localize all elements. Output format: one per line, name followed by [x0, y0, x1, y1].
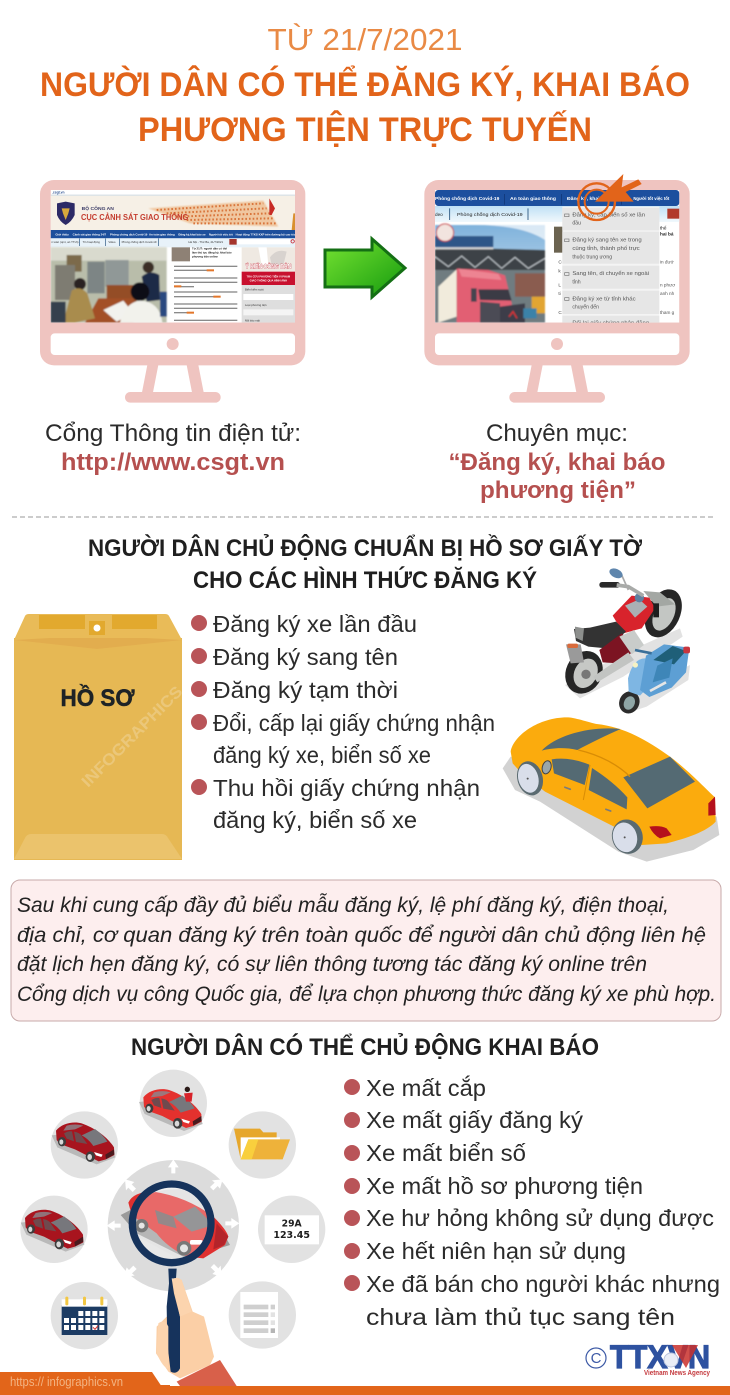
monitor: csgt.vn home page: .csgt.vn [52, 191, 65, 195]
title: NGƯỜI DÂN CÓ THỂ ĐĂNG KÝ, KHAI BÁO [40, 66, 690, 104]
news column: phương tiện online [192, 254, 218, 258]
icon: yellow car [503, 717, 719, 862]
dropdown menu [562, 207, 659, 326]
monitor: registration menu: deo [435, 212, 443, 217]
monitor: registration menu: tham g [660, 310, 675, 315]
sidebar: GIAO THÔNG QUA HÌNH ẢNH [250, 278, 287, 283]
list: registration types: đăng ký, biển số xe [213, 807, 417, 833]
monitor: registration menu: thể [660, 224, 667, 230]
icon: license plate: 29A [282, 1219, 302, 1230]
monitor: csgt.vn home page: Giới thiệu [55, 232, 69, 236]
callout: note: đặt lịch hẹn đăng ký, có sự liên thông tương tác đăng ký online trên [17, 953, 647, 976]
footer bar: https:// infographics.vn [10, 1375, 123, 1389]
icon: dark red car [52, 1122, 115, 1164]
list: registration types: Đăng ký xe lần đầu [213, 611, 417, 637]
diagram: vehicle lookup [20, 1070, 325, 1386]
dropdown menu: cùng tỉnh, thành phố trực [572, 245, 640, 252]
logo: TTXVN: TTXVN [610, 1339, 710, 1375]
sidebar: TRA CỨU PHƯƠNG TIỆN VI PHẠM [247, 273, 291, 278]
callout: note: địa chỉ, cơ quan đăng ký trên toàn quốc để người dân chủ động liên hệ [17, 924, 706, 947]
caption: section: phương tiện” [480, 477, 636, 504]
footer bar [0, 1372, 730, 1395]
caption: portal: http://www.csgt.vn [61, 449, 285, 476]
heading: prepare documents: NGƯỜI DÂN CHỦ ĐỘNG CHUẨN BỊ HỒ SƠ GIẤY TỜ [88, 533, 642, 562]
sidebar [242, 247, 295, 323]
monitor: registration menu: An toàn giao thông [510, 196, 556, 201]
list: registration types: Đăng ký tạm thời [213, 677, 398, 703]
heading: declare: NGƯỜI DÂN CÓ THỂ CHỦ ĐỘNG KHAI BÁO [131, 1032, 599, 1061]
sidebar: Ý KIẾN CÔNG DÂN [245, 262, 291, 270]
callout: note [11, 880, 721, 1021]
icon: folder [234, 1129, 290, 1159]
office photo [51, 247, 167, 323]
monitor: csgt.vn home page: Hà Nội - Thứ Ba, 21/7/2021 [188, 240, 223, 244]
monitor: csgt.vn home page [40, 180, 305, 403]
logo: TTXVN: C [591, 1350, 602, 1367]
icon: dark red car 2 [21, 1210, 84, 1252]
caption: section: Chuyên mục: [486, 420, 628, 447]
callout: note: Cổng dịch vụ công Quốc gia, để lựa chọn phương thức đăng ký xe phù hợp. [17, 983, 716, 1006]
monitor: registration menu: Người tốt việc tốt [633, 195, 670, 201]
title: TỪ 21/7/2021 [268, 22, 462, 57]
icon: magnifier and hand [132, 1183, 237, 1386]
news column: Từ 21/7: người dân có thể [192, 246, 227, 250]
heading: prepare documents [88, 533, 642, 594]
icon: calendar [62, 1297, 107, 1335]
icon: license plate [265, 1215, 319, 1244]
sidebar: Mã bảo mật [245, 319, 260, 323]
monitor: registration menu: anh nh [660, 291, 675, 296]
monitor: registration menu: ti [558, 291, 561, 296]
caption: portal: Cổng Thông tin điện tử: [45, 420, 301, 447]
icon: envelope: HỒ SƠ [60, 684, 135, 712]
list: registration types: Thu hồi giấy chứng nhận [213, 775, 480, 801]
monitor: csgt.vn home page: Phòng chống dịch Covid-19 [110, 232, 148, 236]
caption: section [448, 420, 666, 504]
dropdown menu: Đăng ký xe từ tỉnh khác [572, 296, 636, 303]
monitor: csgt.vn home page: Video [108, 240, 116, 244]
icon: license plate: 123.45 [273, 1230, 310, 1241]
list: declaration cases: Xe mất giấy đăng ký [366, 1107, 584, 1133]
monitor: csgt.vn home page: CỤC CẢNH SÁT GIAO THÔNG [81, 213, 188, 222]
icon: red car under magnifier [121, 1192, 230, 1258]
monitor: csgt.vn home page: Tin hoạt động [83, 240, 100, 244]
dropdown menu: Đổi lại giấy chứng nhận đăng [572, 319, 649, 326]
list: registration types: Đăng ký sang tên [213, 644, 398, 670]
news column: làm thủ tục đăng ký, khai báo [192, 250, 232, 254]
monitor: csgt.vn home page: An toàn giao thông [149, 232, 175, 236]
list: registration types: đăng ký xe, biển số xe [213, 742, 431, 768]
monitor: csgt.vn home page: Hoạt động TTKS KXP trên đường bộ cao tốc [236, 232, 296, 236]
caption: section: “Đăng ký, khai báo [448, 449, 666, 476]
icon: envelope [14, 614, 187, 860]
list: declaration cases: Xe đã bán cho người khác nhưng [366, 1271, 720, 1297]
icon: motorcycle [558, 566, 690, 717]
list: declaration cases: Xe hết niên hạn sử dụng [366, 1238, 626, 1264]
dropdown menu: Sang tên, di chuyển xe ngoài [572, 270, 649, 277]
monitor: registration menu: Phòng chống dịch Covid-19 [457, 212, 523, 217]
heading: prepare documents: CHO CÁC HÌNH THỨC ĐĂNG KÝ [193, 566, 537, 594]
sidebar: Biển kiểm soát [245, 288, 264, 292]
monitor: registration menu: in đướ [660, 259, 674, 264]
list: declaration cases: chưa làm thủ tục sang tên [366, 1304, 675, 1330]
list: registration types: Đổi, cấp lại giấy chứng nhận [213, 710, 495, 736]
list: declaration cases: Xe mất cắp [366, 1075, 486, 1101]
icon: envelope: INFOGRAPHICS [79, 683, 187, 791]
monitor: registration menu: C [558, 310, 562, 315]
monitor: registration menu: hai bả [660, 232, 674, 237]
dropdown menu: chuyển đến [572, 304, 599, 311]
arrow: green [325, 239, 405, 297]
dropdown menu: Đăng ký, cấp biển số xe lần [572, 212, 645, 219]
icon: red car with person [139, 1087, 203, 1131]
monitor: registration menu: n phươ [660, 283, 675, 288]
monitor: csgt.vn home page: Phòng chống dịch Covid-19 [122, 240, 157, 244]
center disc [107, 1159, 239, 1291]
title [40, 22, 690, 149]
monitor: csgt.vn home page: BỘ CÔNG AN [82, 204, 114, 212]
dropdown menu: đầu [572, 221, 581, 227]
monitor: registration menu: C [558, 259, 562, 264]
sidebar: Loại phương tiện [245, 303, 267, 307]
dropdown menu: Đăng ký sang tên xe trong [572, 238, 642, 244]
monitor: registration menu [424, 174, 690, 403]
list: registration types [191, 611, 495, 833]
title: PHƯƠNG TIỆN TRỰC TUYẾN [138, 111, 592, 149]
caption: portal [45, 420, 301, 476]
list: declaration cases [344, 1075, 720, 1330]
monitor: registration menu: Đăng ký, khai báo xe [567, 196, 617, 201]
monitor: csgt.vn home page: n toàn (qmt, an TTxh) [51, 240, 79, 244]
monitor: csgt.vn home page: Cảnh sát giao thông 24/7 [73, 232, 107, 236]
dropdown menu: thuộc trung ương [572, 254, 612, 260]
icon: document list [240, 1292, 278, 1338]
list: declaration cases: Xe hư hỏng không sử dụng được [366, 1205, 714, 1231]
icon: orange pointer [578, 174, 642, 220]
dropdown menu: tỉnh [572, 278, 581, 285]
callout: note: Sau khi cung cấp đầy đủ biểu mẫu đăng ký, lệ phí đăng ký, điện thoại, [17, 894, 669, 917]
truck photo [435, 224, 545, 323]
monitor: csgt.vn home page: Đăng ký,khai báo xe [178, 232, 206, 236]
monitor: registration menu: Phòng chống dịch Covid-19 [435, 195, 500, 201]
monitor: csgt.vn home page: Người tốt việc tốt [209, 232, 233, 236]
logo: TTXVN: Vietnam News Agency [644, 1370, 710, 1377]
monitor: registration menu: k [558, 269, 561, 274]
monitor: registration menu: L [558, 283, 561, 288]
list: declaration cases: Xe mất biển số [366, 1140, 526, 1166]
list: declaration cases: Xe mất hồ sơ phương tiện [366, 1173, 643, 1199]
news column [172, 246, 237, 321]
